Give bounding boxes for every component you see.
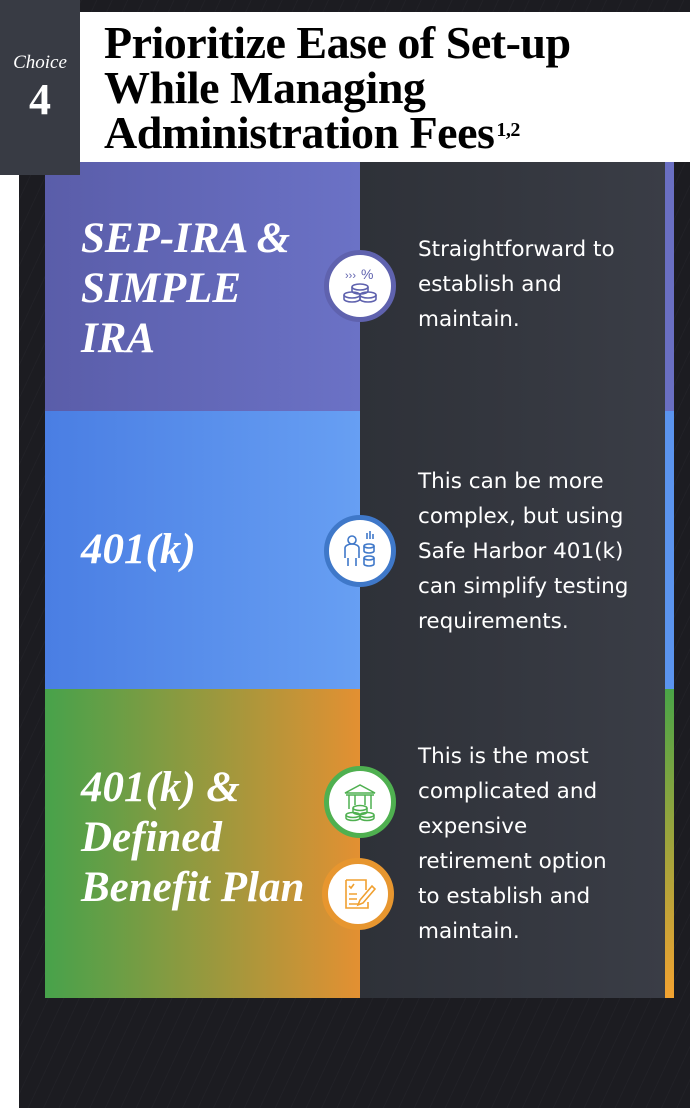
icon: coins percent: % [361, 266, 373, 282]
icon: checklist [322, 858, 394, 930]
text: 401(k): This can be more [418, 469, 604, 494]
title: Administration Fees1,2 [104, 107, 520, 158]
panel: SEP-IRA [45, 162, 674, 411]
label: SEP-IRA: IRA [81, 315, 155, 362]
text: 401(k) & DB: expensive [418, 814, 527, 839]
text: SEP-IRA [418, 237, 615, 332]
icon: coins percent [324, 250, 396, 322]
text: 401(k) & DB [418, 744, 607, 944]
icon: coins percent: ››› [345, 270, 356, 282]
icon: person coins [324, 515, 396, 587]
text: SEP-IRA: establish and [418, 272, 562, 297]
title: While Managing [104, 62, 425, 113]
label: SEP-IRA: SIMPLE [81, 265, 241, 312]
text: 401(k): Safe Harbor 401(k) [418, 539, 623, 564]
text: 401(k): can simplify testing [418, 574, 628, 599]
label: 401(k) & DB: Benefit Plan [81, 864, 304, 911]
label: 401(k) & DB: 401(k) & [81, 764, 240, 811]
title [80, 12, 691, 162]
choice badge: 4 [29, 75, 51, 124]
text: 401(k) & DB: retirement option [418, 849, 607, 874]
panel: 401(k) & Defined Benefit [45, 689, 674, 998]
label: 401(k) & DB: Defined [81, 814, 222, 861]
text: SEP-IRA: Straightforward to [418, 237, 615, 262]
choice badge: Choice [13, 52, 67, 73]
icon: bank coins [324, 766, 396, 838]
text: 401(k) & DB: maintain. [418, 919, 520, 944]
text: SEP-IRA: maintain. [418, 307, 520, 332]
label: 401(k): 401(k) [81, 526, 196, 573]
label: SEP-IRA [80, 215, 290, 362]
text: 401(k) & DB: This is the most [418, 744, 589, 769]
panel: 401(k) [45, 411, 674, 689]
choice badge [0, 0, 80, 175]
text: 401(k): requirements. [418, 609, 569, 634]
text: 401(k) & DB: complicated and [418, 779, 597, 804]
title: Prioritize Ease of Set-up [104, 17, 571, 68]
text: 401(k): complex, but using [418, 504, 623, 529]
label: SEP-IRA: SEP-IRA & [81, 215, 290, 262]
text: 401(k) & DB: to establish and [418, 884, 590, 909]
text: 401(k) [418, 469, 628, 634]
label: 401(k) & DB [80, 764, 304, 911]
